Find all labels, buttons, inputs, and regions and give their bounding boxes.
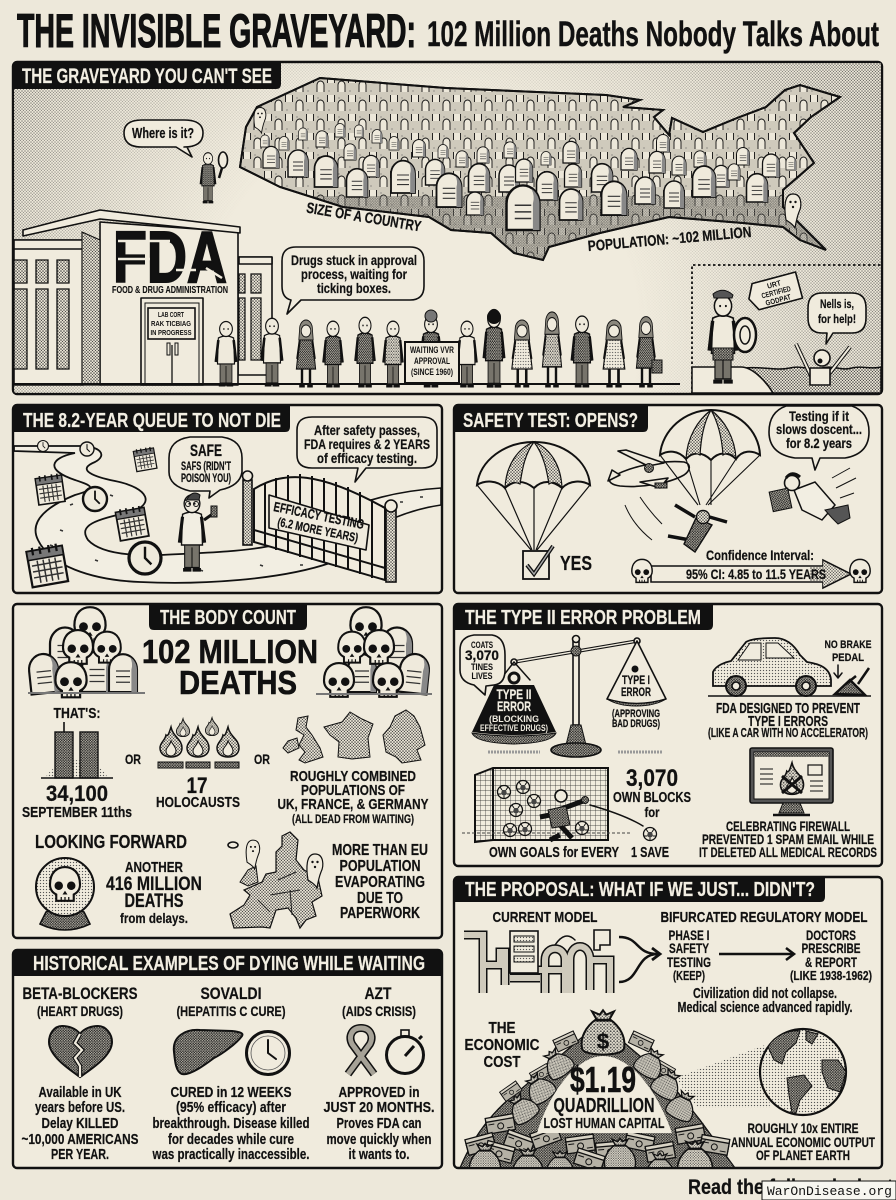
column: beta-blockers	[22, 984, 138, 1163]
column: sovaldi: (HEPATITIS C CURE)	[176, 1003, 286, 1019]
stat: $1.19 quadrillion: $1.19	[570, 1059, 636, 1100]
icon: skull left	[632, 559, 652, 582]
column: beta-blockers: (HEART DRUGS)	[37, 1003, 123, 1019]
heading: historical examples: HISTORICAL EXAMPLES OF DYING WHILE WAITING	[33, 953, 425, 975]
winding road	[14, 446, 441, 583]
speech bubble: help	[808, 293, 866, 344]
banner: efficacy testing: (6.2 MORE YEARS)	[276, 515, 359, 545]
label: current model: CURRENT MODEL	[492, 909, 598, 926]
cone from money to globe	[675, 1045, 770, 1108]
heading: the body count: THE BODY COUNT	[160, 607, 296, 629]
column: sovaldi	[152, 984, 310, 1163]
weight: type II error: ERROR	[497, 698, 531, 714]
icon: awareness ribbon	[348, 1028, 374, 1074]
door with sign: IN PROGRESS	[150, 328, 192, 337]
label: that's: THAT'S:	[54, 705, 100, 722]
label: confidence interval: Confidence Interval:	[706, 547, 814, 563]
speech bubble: efficacy	[297, 417, 437, 482]
speech bubble: safe: POISON YOU)	[181, 473, 231, 485]
text: another 416 million: from delays.	[120, 910, 188, 926]
bags and bills: $	[597, 1029, 609, 1054]
column: beta-blockers: Available in UK	[38, 1084, 122, 1101]
sign: waiting for approval: (SINCE 1960)	[411, 367, 453, 377]
label: population: POPULATION: ~102 MILLION	[587, 224, 752, 255]
cleared area for text	[537, 1056, 672, 1133]
speech bubble: safe	[169, 437, 242, 498]
text: celebrating firewall	[699, 818, 877, 860]
heading: safety test	[454, 405, 648, 432]
speech bubble: help: Nells is,	[820, 297, 854, 311]
column: sovaldi: was practically inaccessible.	[152, 1146, 310, 1163]
column: beta-blockers: PER YEAR.	[51, 1146, 109, 1163]
icon: clock	[246, 1032, 290, 1074]
text: the economic cost: COST	[484, 1054, 521, 1071]
text: EU population: MORE THAN EU	[332, 842, 428, 859]
text: doctors prescribe	[790, 927, 872, 983]
queue of waiting patients	[216, 310, 662, 387]
text: another 416 million: ANOTHER	[125, 859, 183, 876]
ground line	[14, 383, 680, 385]
speech bubble: drugs stuck: process, waiting for	[301, 266, 407, 282]
pan: type I error: ERROR	[621, 685, 651, 699]
text: phase I	[667, 927, 711, 983]
door with sign: RAK TICBIAG	[151, 319, 191, 328]
text: another 416 million: DEATHS	[124, 891, 184, 912]
icon: ghost on west coast	[254, 108, 266, 133]
heading: historical examples	[13, 950, 442, 976]
icon: twin towers	[41, 722, 113, 778]
label: no brake pedal: PEDAL	[832, 652, 864, 664]
skull pile right	[316, 607, 432, 697]
map: USA covered in gravestones	[230, 78, 840, 266]
tag: certified: GODPAT	[764, 292, 792, 308]
text: EU population: EVAPORATING	[335, 874, 425, 891]
tag: certified	[745, 272, 803, 312]
pan: type I error	[607, 641, 666, 706]
stat: september 11ths	[22, 781, 132, 821]
balance scale	[472, 636, 666, 757]
text: combined populations: POPULATIONS OF	[301, 782, 405, 799]
banner: efficacy testing	[269, 495, 369, 550]
text: civilization	[678, 985, 852, 1016]
label: yes: YES	[560, 553, 592, 575]
speech bubble: where is it	[124, 120, 203, 157]
goalkeeper	[540, 790, 588, 840]
text: roughly 10x	[731, 1120, 875, 1163]
sign: waiting for approval: APPROVAL	[414, 356, 450, 366]
icon: bureaucratic pipes	[464, 930, 610, 993]
big number: 102 million deaths	[142, 633, 318, 701]
column: AZT	[324, 984, 434, 1163]
title: THE INVISIBLE GRAVEYARD:	[17, 4, 416, 57]
stat: 3,070 own blocks: OWN BLOCKS	[613, 790, 691, 806]
speech bubble: slow descent: Testing if it	[789, 408, 849, 424]
tag: certified: URT	[766, 278, 782, 291]
label: food and drug administration: FOOD & DRUG ADMINISTRATION	[112, 285, 228, 296]
panel: the graveyard you can't see	[13, 62, 882, 394]
panel: safety test	[454, 405, 882, 593]
text: the economic cost	[464, 1020, 540, 1071]
speech bubble: efficacy: of efficacy testing.	[317, 450, 417, 466]
heading: queue: THE 8.2-YEAR QUEUE TO NOT DIE	[23, 409, 281, 432]
speech bubble: drugs stuck	[282, 247, 424, 314]
stat: $1.19 quadrillion	[544, 1059, 664, 1132]
speech bubble: costs 3,070 times lives: LIVES	[472, 671, 492, 682]
right wing	[238, 257, 272, 375]
speech bubble: costs 3,070 times lives: 3,070	[465, 647, 499, 663]
weight: type II error	[472, 662, 556, 744]
heading: type II	[454, 604, 713, 630]
roof	[23, 210, 240, 236]
text: civilization: Civilization did not collapse.	[693, 985, 837, 1002]
panel: historical examples	[13, 950, 442, 1168]
text: designed to prevent	[708, 700, 868, 740]
column: sovaldi: breakthrough. Disease killed	[152, 1115, 310, 1132]
big number: 102 million deaths: 102 MILLION	[142, 633, 318, 670]
icon: crystal ball with skull	[36, 858, 94, 930]
column: beta-blockers: BETA-BLOCKERS	[22, 984, 138, 1003]
speech bubble: costs 3,070 times lives: COATS	[471, 640, 493, 651]
stat: 3,070 own blocks	[613, 765, 691, 820]
text: combined populations: UK, FRANCE, & GERMANY	[278, 796, 428, 813]
column: sovaldi: CURED in 12 WEEKS	[170, 1084, 292, 1101]
speech bubble: drugs stuck: Drugs stuck in approval	[291, 252, 417, 268]
text: EU population: POPULATION	[340, 858, 420, 875]
column: sovaldi: for decades while cure	[168, 1131, 294, 1148]
left wing	[14, 240, 83, 385]
column: beta-blockers: ~10,000 AMERICANS	[22, 1131, 138, 1148]
text: the economic cost: ECONOMIC	[464, 1037, 540, 1054]
door with sign	[141, 298, 203, 385]
column: AZT: APPROVED in	[338, 1084, 420, 1101]
text: phase I: PHASE I	[668, 927, 710, 943]
label: no brake pedal	[824, 639, 872, 664]
stat: 3,070 own blocks: 3,070	[626, 765, 678, 792]
icon: car without brake pedal	[708, 638, 871, 696]
text: another 416 million	[106, 859, 202, 926]
icon: soccer goal	[462, 768, 656, 842]
speech bubble: slow descent: slows doscent...	[776, 421, 862, 437]
text: doctors prescribe: DOCTORS	[806, 927, 856, 943]
speech bubble: safe: SAFS (RIDN'T	[181, 461, 231, 473]
speech bubble: slow descent	[769, 406, 869, 470]
checkbox	[523, 546, 553, 579]
speech bubble: efficacy: After safety passes,	[314, 422, 420, 438]
text: the economic cost: THE	[488, 1020, 516, 1037]
pan: type I error: TYPE I	[622, 673, 650, 687]
column: AZT: JUST 20 MONTHS.	[324, 1099, 434, 1116]
stat: september 11ths: SEPTEMBER 11ths	[22, 804, 132, 821]
speech bubble: slow descent: for 8.2 years	[786, 435, 852, 451]
panel: the body count	[13, 604, 442, 938]
panel: the proposal	[454, 877, 882, 1181]
figure: inspector with magnifying glass	[201, 152, 228, 203]
inset: lifeguard who refuses to help	[692, 265, 881, 394]
skull pile left	[27, 607, 145, 697]
map: Europe with ghosts	[228, 832, 323, 928]
column: beta-blockers: Delay KILLED	[42, 1115, 119, 1132]
column: sovaldi: (95% efficacy) after	[176, 1099, 286, 1116]
FDA building	[14, 210, 272, 385]
icon: broken heart	[49, 1026, 112, 1077]
icon: monitor firewall	[750, 748, 833, 815]
calendars on the road	[26, 446, 157, 587]
label: no brake pedal: NO BRAKE	[824, 639, 872, 651]
text: roughly 10x: OF PLANET EARTH	[756, 1147, 850, 1163]
speech bubble: safe: SAFE	[190, 441, 222, 460]
lifeguard	[709, 290, 756, 383]
text: doctors prescribe: (LIKE 1938-1962)	[790, 968, 872, 983]
text: another 416 million: 416 MILLION	[106, 874, 202, 895]
plane	[608, 450, 689, 488]
panel: 8.2-year queue	[13, 405, 442, 593]
stat: holocausts: HOLOCAUSTS	[156, 794, 240, 811]
icon: flames	[158, 718, 239, 768]
arrow: confidence interval range	[651, 560, 851, 588]
scientist	[179, 493, 217, 571]
weight: type II error: (BLOCKING	[489, 714, 539, 725]
heading: queue	[13, 405, 290, 432]
label: or: OR	[125, 751, 141, 767]
gate	[242, 471, 397, 582]
skydiver under parachute	[625, 410, 760, 552]
heading: the body count	[149, 604, 307, 630]
text: combined populations: (ALL DEAD FROM WAITING)	[292, 812, 414, 826]
stat: $1.19 quadrillion: QUADRILLION	[554, 1095, 654, 1117]
column: AZT: (AIDS CRISIS)	[342, 1003, 416, 1019]
caption: own goals: 1 SAVE	[631, 844, 669, 861]
banner: efficacy testing: EFFICACY TESTING	[272, 499, 365, 532]
bags and bills	[465, 1010, 730, 1181]
heading: type II: THE TYPE II ERROR PROBLEM	[465, 607, 701, 629]
sign: waiting for approval: WAITING VVR	[410, 345, 454, 355]
caption: approving bad drugs: (APPROVING	[612, 708, 660, 720]
speech bubble: where is it: Where is it?	[132, 125, 194, 142]
column: AZT: AZT	[364, 984, 392, 1003]
text: EU population	[332, 842, 428, 922]
panel: type II error problem	[454, 604, 882, 866]
weight: type II error: TYPE II	[496, 686, 532, 702]
column: beta-blockers: years before US.	[35, 1099, 125, 1116]
text: doctors prescribe: PRESCRIBE	[802, 940, 860, 956]
text: roughly 10x: ROUGHLY 10x ENTIRE	[748, 1120, 858, 1136]
big number: 102 million deaths: DEATHS	[179, 664, 297, 701]
maps: UK France Germany	[283, 710, 425, 763]
heading: looking forward: LOOKING FORWARD	[35, 832, 187, 852]
arrow: to doctors	[719, 948, 794, 960]
heading: safety test: SAFETY TEST: OPENS?	[463, 409, 638, 432]
speech bubble: costs 3,070 times lives: TINES	[471, 662, 493, 673]
weight: type II error: EFFECTIVE DRUGS)	[480, 723, 548, 734]
speech bubble: help: for help!	[818, 312, 856, 326]
text: designed to prevent: TYPE I ERRORS	[748, 713, 828, 730]
column: AZT: move quickly when	[326, 1131, 432, 1148]
icon: ghost on Gulf coast	[785, 194, 801, 228]
stat: $1.19 quadrillion: LOST HUMAN CAPITAL	[544, 1115, 664, 1132]
icon: liver	[174, 1030, 243, 1074]
speech bubble: drugs stuck: ticking boxes.	[317, 280, 391, 296]
logo: FDA: FDA	[113, 218, 227, 298]
text: phase I: TESTING	[667, 954, 711, 970]
label: size of a country: SIZE OF A COUNTRY	[305, 200, 422, 236]
heading: the graveyard	[13, 62, 281, 89]
URL box: WarOnDisease.org	[767, 1184, 892, 1199]
speech bubble: costs 3,070 times lives	[460, 635, 505, 695]
column: sovaldi: SOVALDI	[200, 984, 262, 1003]
parachute with checkbox	[477, 442, 592, 579]
arrow: confidence interval range: 95% CI: 4.85 to 11.5 YEARS	[686, 566, 826, 582]
icon: globe	[760, 1029, 846, 1115]
text: combined populations	[278, 768, 428, 826]
clocks on the road	[38, 440, 161, 574]
falling scientist with clipboard	[769, 468, 856, 524]
speech bubble: efficacy: FDA requires & 2 YEARS	[304, 436, 430, 452]
text: EU population: DUE TO	[357, 890, 403, 907]
text: phase I: SAFETY	[669, 940, 709, 956]
door with sign: LAB CORT	[158, 310, 184, 319]
icon: skull right	[850, 559, 870, 582]
column: AZT: Proves FDA can	[336, 1115, 422, 1132]
money pile	[460, 1010, 735, 1181]
stat: september 11ths: 34,100	[46, 781, 108, 806]
caption: approving bad drugs	[612, 708, 660, 730]
text: doctors prescribe: & REPORT	[805, 954, 857, 970]
arrows: merging into bifurcated model	[619, 937, 660, 982]
heading: the graveyard: THE GRAVEYARD YOU CAN'T SEE	[22, 65, 272, 88]
main block	[100, 222, 238, 385]
icon: stopwatch	[386, 1030, 424, 1074]
column: AZT: it wants to.	[348, 1146, 410, 1163]
stat: 3,070 own blocks: for	[644, 804, 660, 820]
sign: waiting for approval	[405, 342, 459, 383]
caption: own goals: OWN GOALS for EVERY	[489, 844, 619, 861]
stat: holocausts: 17	[186, 773, 208, 798]
label: or second: OR	[254, 751, 270, 767]
text: phase I: (KEEP)	[673, 968, 705, 983]
text: combined populations: ROUGHLY COMBINED	[290, 768, 416, 785]
drowning swimmer	[796, 344, 850, 385]
stat: holocausts	[156, 773, 240, 811]
caption: approving bad drugs: BAD DRUGS)	[612, 718, 660, 730]
tag: certified: CERTIFIED	[760, 284, 792, 300]
water	[745, 367, 881, 393]
shore	[692, 367, 773, 393]
text: EU population: PAPERWORK	[340, 905, 420, 922]
